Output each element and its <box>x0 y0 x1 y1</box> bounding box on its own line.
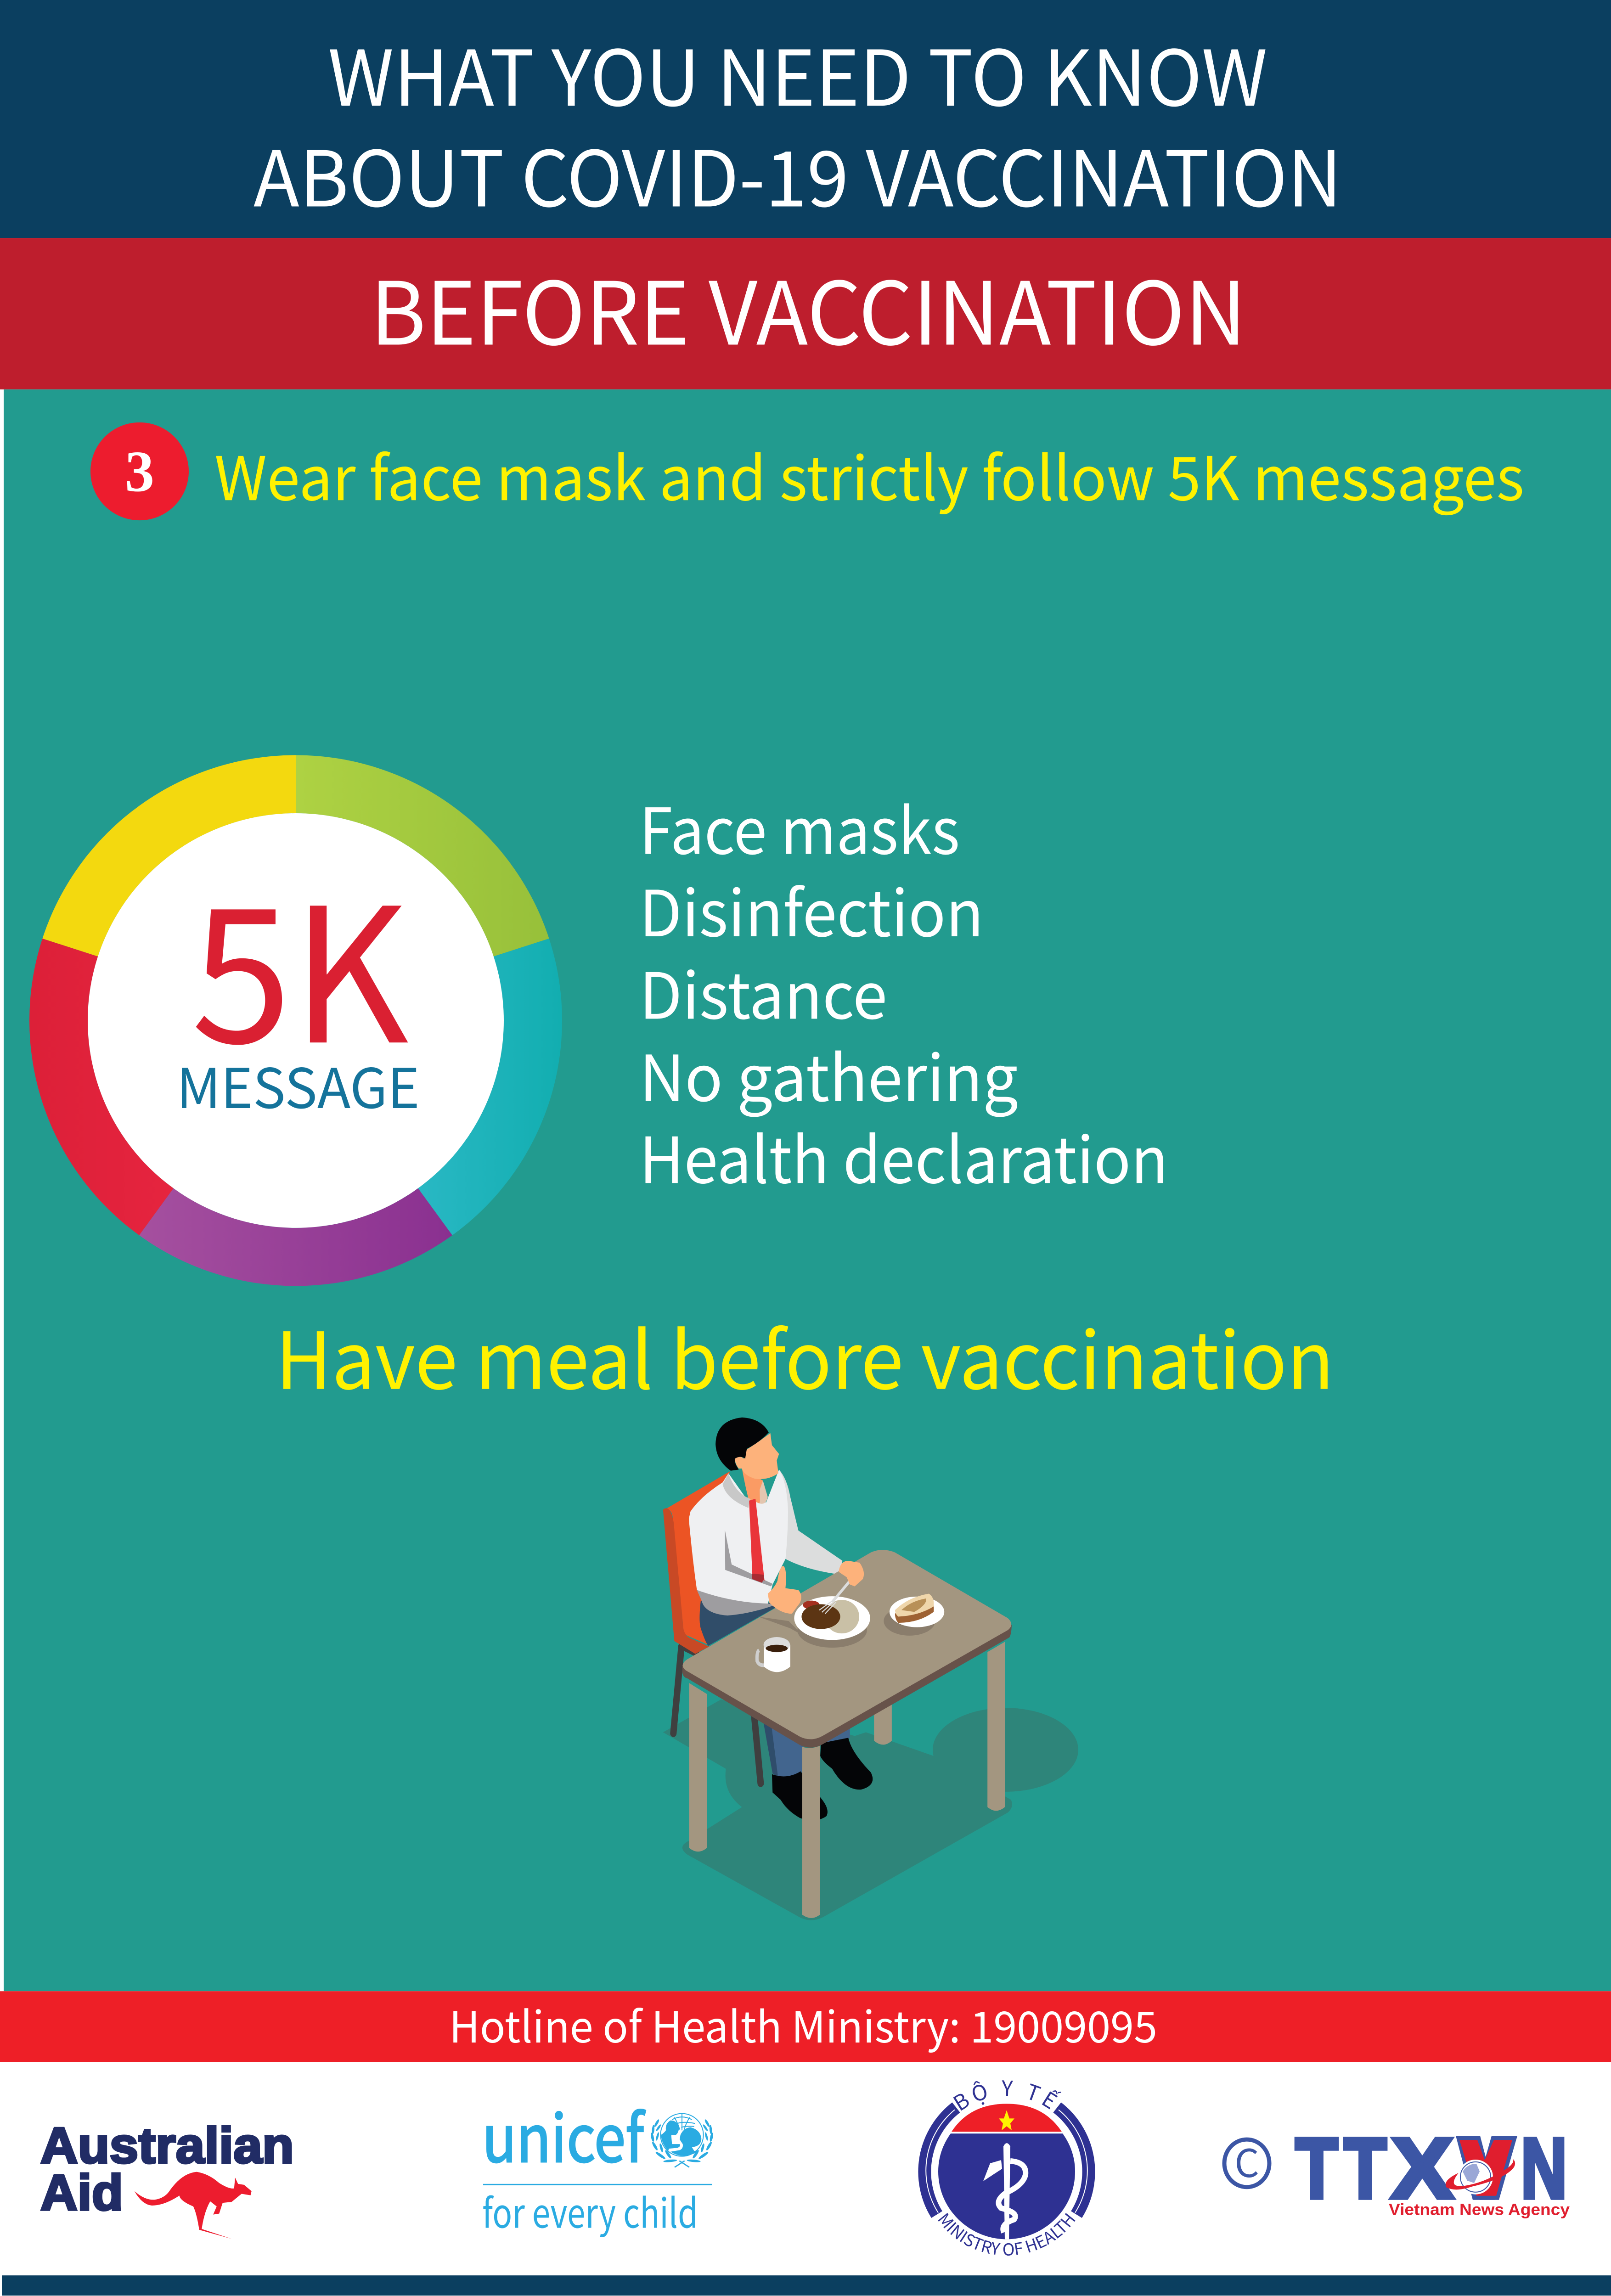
hotline text: Hotline of Health Ministry: 19009095 <box>449 1993 1157 2055</box>
shadow of hand <box>758 1617 803 1636</box>
step heading <box>90 422 1524 520</box>
illustration: man eating at table <box>663 1418 1078 1920</box>
sub heading: Have meal before vaccination <box>276 1298 1334 1412</box>
fork <box>819 1581 850 1614</box>
wordmark: unicef <box>482 2087 646 2181</box>
panel: logo strip <box>0 2062 1611 2275</box>
ring segment: red <box>29 939 174 1235</box>
logo: Ministry of Health <box>924 2072 1089 2261</box>
wreath right <box>687 2119 714 2163</box>
wordmark line 2: Aid <box>40 2165 123 2221</box>
red V <box>1459 2140 1512 2196</box>
table back leg <box>874 1701 892 1745</box>
ring segment: purple <box>139 1188 452 1286</box>
collar <box>723 1474 750 1508</box>
badge: number 3 <box>90 422 189 520</box>
icon: kangaroo <box>135 2172 252 2239</box>
ground shadow <box>663 1699 1078 1920</box>
man torso and head <box>689 1418 843 1615</box>
face <box>735 1433 779 1479</box>
star <box>999 2110 1014 2130</box>
staff and snake <box>983 2143 1025 2239</box>
wordmark <box>1296 2121 1567 2216</box>
chair back <box>663 1471 730 1654</box>
MESSAGE label: MESSAGE <box>176 1045 420 1124</box>
hair <box>715 1418 769 1471</box>
panel: bottom bar <box>2 2275 1611 2296</box>
arc text top: BỘ Y TẾ <box>947 2072 1066 2117</box>
trousers seated <box>699 1601 781 1646</box>
chair legs <box>673 1647 760 1784</box>
neck <box>742 1469 763 1503</box>
table top <box>682 1550 1012 1748</box>
blue shield <box>938 2133 1075 2239</box>
big 5K: 5K <box>191 827 411 1097</box>
near trouser leg and shoe <box>764 1723 828 1820</box>
ring segment: yellow <box>42 755 296 957</box>
plate of food <box>794 1596 870 1648</box>
donut chart: 5K message <box>29 755 562 1286</box>
panel: teal main background <box>4 389 1611 1991</box>
wreath left <box>650 2119 677 2163</box>
wordmark: T <box>1344 2121 1386 2216</box>
logo: unicef <box>482 2087 714 2240</box>
list: 5K items <box>639 780 1168 1201</box>
icon: copyright <box>1224 2133 1269 2189</box>
ring segment: green <box>296 755 549 957</box>
coffee cup <box>757 1637 790 1672</box>
globe <box>660 2114 704 2156</box>
logo: TTXVN <box>1224 2121 1570 2219</box>
arc text bottom: MINISTRY OF HEALTH <box>933 2207 1080 2261</box>
ring segment: teal <box>418 939 562 1235</box>
item: Distance <box>639 945 887 1037</box>
blue V outline <box>1456 2136 1517 2200</box>
icon: copyright: C <box>1234 2133 1259 2189</box>
globe with orbit <box>1446 2159 1515 2195</box>
item: Face masks <box>639 780 960 872</box>
panel: hotline bar <box>0 1991 1611 2062</box>
step text: Wear face mask and strictly follow 5K messages <box>214 430 1524 518</box>
panel: title banner <box>0 0 1611 238</box>
hands <box>768 1561 864 1614</box>
sleeve far arm <box>779 1469 843 1574</box>
red dome <box>952 2104 1062 2132</box>
wordmark: N <box>1521 2121 1567 2216</box>
wordmark: V <box>1459 2121 1515 2216</box>
centre disc <box>88 813 504 1228</box>
icon: unicef emblem <box>650 2114 714 2167</box>
title line 2: ABOUT COVID-19 VACCINATION <box>253 118 1342 229</box>
item: Health declaration <box>639 1109 1168 1201</box>
agency name: Vietnam News Agency <box>1389 2201 1570 2219</box>
plate of bread <box>884 1594 944 1636</box>
divider line <box>483 2184 712 2185</box>
arm crease <box>725 1530 772 1587</box>
shirt <box>689 1469 788 1604</box>
badge: number 3: 3 <box>125 439 154 504</box>
tie <box>749 1499 765 1581</box>
table legs <box>689 1642 1005 1918</box>
item: No gathering <box>639 1027 1018 1120</box>
shirt hem <box>697 1590 776 1615</box>
item: Disinfection <box>639 862 984 955</box>
far trouser leg and shoe <box>819 1728 873 1790</box>
wordmark line 1: Australian <box>40 2118 294 2174</box>
panel: section banner <box>0 238 1611 389</box>
wordmark: X <box>1391 2121 1453 2216</box>
outer arcs <box>924 2107 1089 2215</box>
title line 1: WHAT YOU NEED TO KNOW <box>328 17 1267 128</box>
section heading: BEFORE VACCINATION <box>370 244 1246 370</box>
wordmark: T <box>1296 2121 1338 2216</box>
mother and child <box>661 2121 680 2151</box>
logo: Australian Aid <box>40 2118 294 2239</box>
tagline: for every child <box>482 2182 698 2240</box>
